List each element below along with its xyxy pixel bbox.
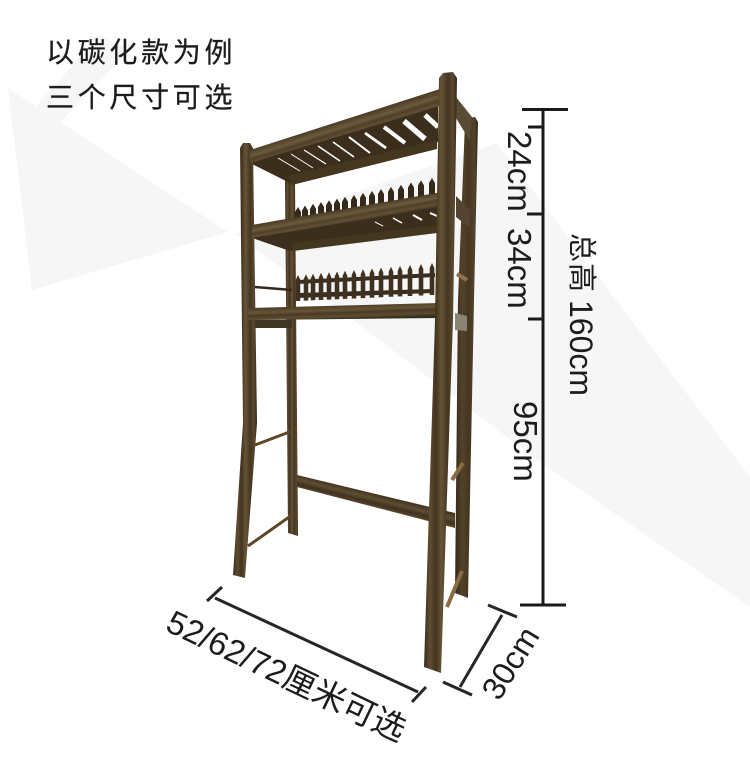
label: 34cm: 34cm <box>501 228 538 309</box>
label: width options: 52/62/72厘米可选 <box>161 603 412 748</box>
middle rail <box>252 192 442 238</box>
dark piece under third rail <box>255 320 292 328</box>
heading: two lines of text: 以碳化款为例 <box>46 37 236 68</box>
front right post <box>424 72 457 673</box>
heading: two lines of text <box>46 37 236 113</box>
back right post <box>455 117 478 598</box>
lower picket fence <box>255 263 435 301</box>
ladder rods <box>248 431 463 607</box>
third rail <box>248 303 440 320</box>
heading: two lines of text: 三个尺寸可选 <box>46 82 236 113</box>
top rail <box>250 88 443 163</box>
label: total height: 160cm <box>563 300 599 396</box>
side rails <box>455 97 472 331</box>
label: total height: 总高 <box>565 233 598 293</box>
lower cross beam <box>297 475 455 528</box>
label: 95cm: 95cm <box>507 401 544 482</box>
front left post <box>233 143 257 578</box>
depth dimension line <box>443 605 517 695</box>
width dimension line <box>207 587 426 702</box>
height dimension line <box>520 109 568 605</box>
back left inner post <box>285 180 298 536</box>
background: faint grey polygons <box>8 35 750 607</box>
upper spiked fence <box>295 178 435 220</box>
second shelf <box>252 205 437 251</box>
label: total height <box>563 233 599 396</box>
top shelf with slats <box>250 103 438 185</box>
wooden rack <box>233 72 478 673</box>
label: 24cm: 24cm <box>501 131 538 212</box>
label: 30cm: 30cm <box>474 620 546 706</box>
